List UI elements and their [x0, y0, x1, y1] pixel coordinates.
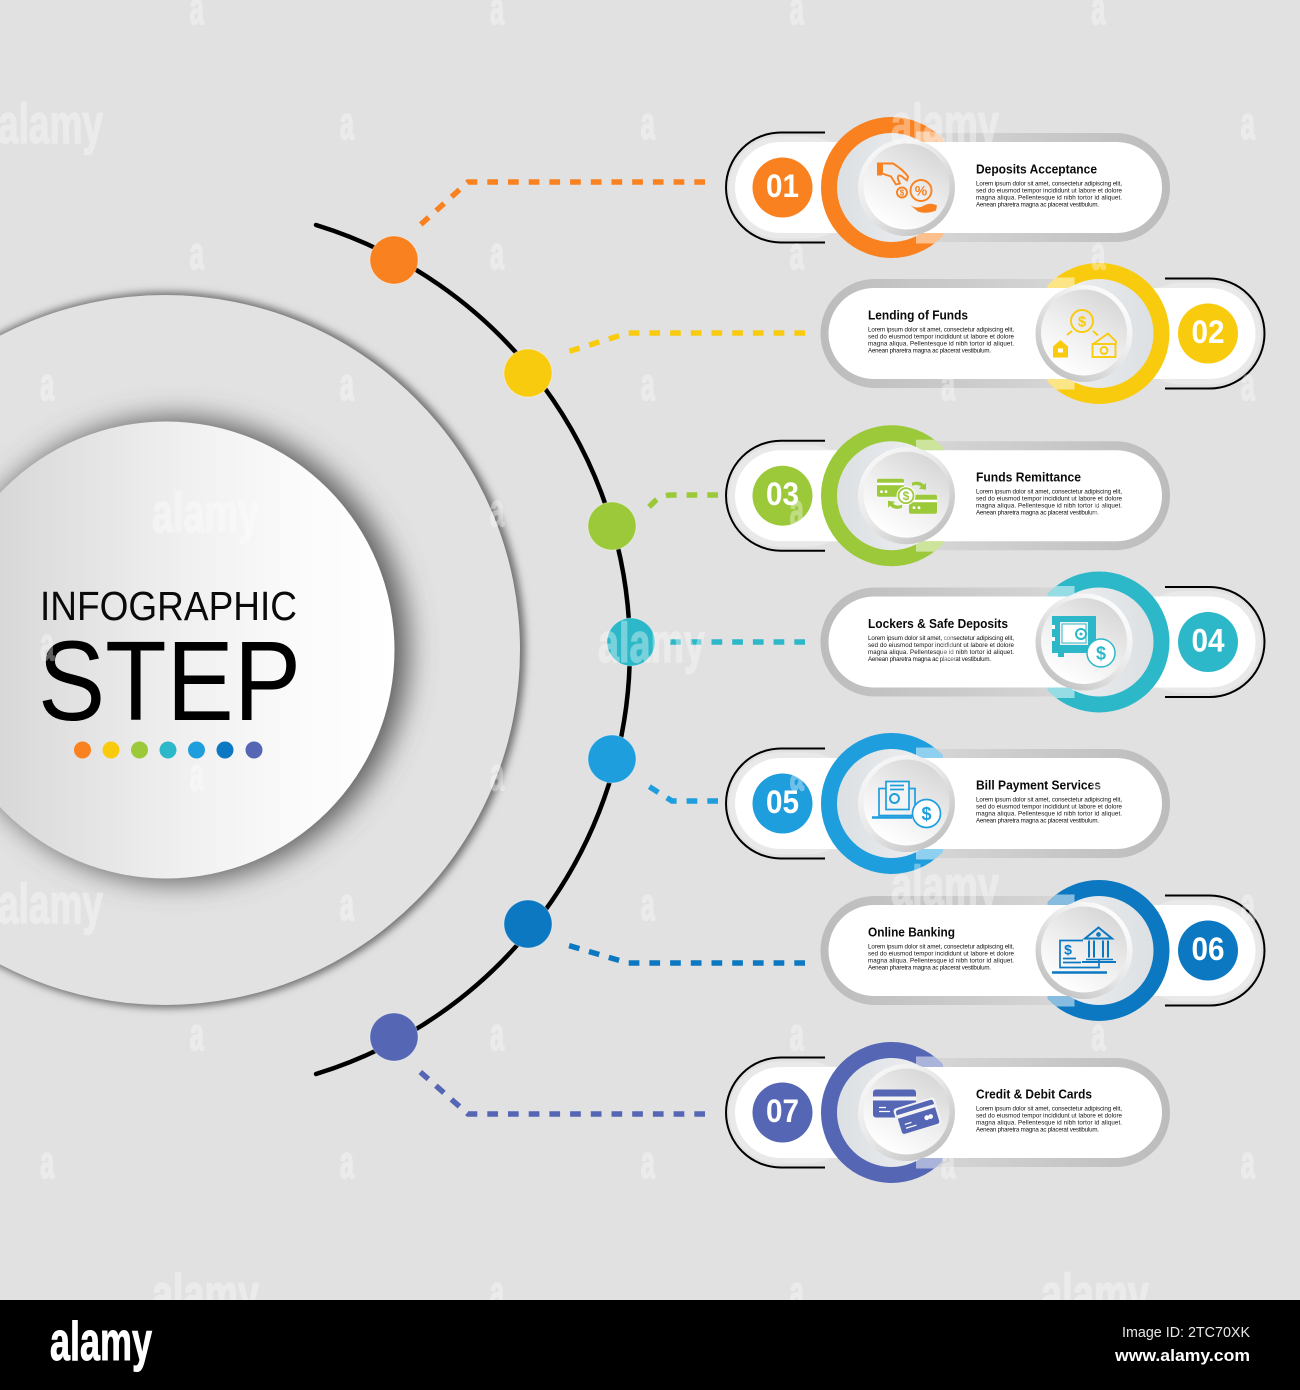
- badge 03: [752, 466, 812, 526]
- text: Lockers and Safe Deposits: Lorem ipsum dolor sit amet, consectetur adipiscing elit,: [868, 635, 1014, 642]
- text: Lockers and Safe Deposits: magna aliqua. Pellentesque id nibh tortor id aliquet.: [868, 649, 1014, 656]
- text: Bill Payment Services: Aenean pharetra magna ac placerat vestibulum.: [976, 818, 1099, 824]
- text: Online Banking: Aenean pharetra magna ac placerat vestibulum.: [868, 964, 991, 972]
- icon: hand and coins: [877, 162, 937, 213]
- panel: step 05 Bill Payment Services: [726, 741, 1170, 866]
- text: Deposits Acceptance: magna aliqua. Pellentesque id nibh tortor id aliquet.: [976, 194, 1122, 202]
- text: Online Banking: Lorem ipsum dolor sit amet, consectetur adipiscing elit,: [868, 944, 1014, 950]
- footer bar: [0, 1300, 1300, 1390]
- timeline nodes: [370, 236, 655, 1061]
- watermark: alamy wordmarks: alamy: [598, 611, 705, 674]
- node 07: [370, 1013, 418, 1061]
- watermark: small a marks: aaaa: [40, 618, 1255, 670]
- footer logo: alamy: [50, 1310, 152, 1372]
- text: Deposits Acceptance: sed do eiusmod tempor incididunt ut labore et dolore: [976, 188, 1123, 194]
- badge 06: [1178, 920, 1238, 980]
- node 05: [588, 735, 636, 783]
- panel: step 03 Funds Remittance: [726, 433, 1170, 558]
- text: Lending of Funds: magna aliqua. Pellentesque id nibh tortor id aliquet.: [868, 340, 1014, 348]
- text: Deposits Acceptance: Deposits Acceptance: [976, 162, 1097, 176]
- footer image id: Image ID: 2TC70XK: [1122, 1324, 1250, 1341]
- watermark: alamy wordmarks: alamy: [0, 92, 103, 155]
- text: Credit and Debit Cards: [976, 1086, 1123, 1134]
- badge 06: 06: [1192, 931, 1224, 967]
- icon: bill documents with coin: $: [921, 804, 932, 824]
- heading line 1: INFOGRAPHIC: [40, 583, 297, 629]
- icon: safe with coin: [1052, 616, 1115, 667]
- watermark: alamy wordmarks: alamy: [152, 481, 259, 544]
- text: Credit and Debit Cards: magna aliqua. Pellentesque id nibh tortor id aliquet.: [976, 1120, 1122, 1126]
- badge 01: 01: [766, 168, 799, 204]
- panel: step 06 Online Banking: [820, 888, 1264, 1013]
- text: Online Banking: sed do eiusmod tempor incididunt ut labore et dolore: [868, 950, 1015, 958]
- badge 04: 04: [1192, 622, 1225, 658]
- icon: laptop and bank: [1052, 928, 1116, 972]
- text: Lending of Funds: Lorem ipsum dolor sit amet, consectetur adipiscing elit,: [868, 326, 1014, 334]
- badge 01: [752, 158, 812, 218]
- watermark: alamy wordmarks: alamy: [1041, 1262, 1149, 1325]
- panel: step 04 Lockers and Safe Deposits: [820, 580, 1264, 704]
- text: Lockers and Safe Deposits: Aenean pharetra magna ac placerat vestibulum.: [868, 656, 991, 663]
- text: Online Banking: magna aliqua. Pellentesque id nibh tortor id aliquet.: [868, 958, 1014, 964]
- heading line 2: STEP: [38, 618, 301, 744]
- text: Lending of Funds: [868, 308, 1015, 354]
- text: Lockers and Safe Deposits: sed do eiusmod tempor incididunt ut labore et dolore: [868, 642, 1015, 649]
- text: Lending of Funds: sed do eiusmod tempor incididunt ut labore et dolore: [868, 334, 1015, 340]
- connector 01: [418, 182, 705, 227]
- watermark: small a marks: aaaaa: [40, 1136, 1255, 1188]
- text: Deposits Acceptance: Aenean pharetra magna ac placerat vestibulum.: [976, 202, 1099, 208]
- text: Bill Payment Services: Bill Payment Services: [976, 778, 1101, 792]
- watermark: small a marks: aaa: [490, 484, 1106, 536]
- watermark: small a marks: aaaa: [190, 227, 1106, 279]
- connector 07: [418, 1070, 705, 1114]
- icon: bill documents with coin: [872, 782, 940, 828]
- connector 05: [645, 784, 718, 801]
- node 04: [607, 618, 655, 666]
- text: Funds Remittance: Aenean pharetra magna ac placerat vestibulum.: [976, 510, 1099, 517]
- black arc timeline: [316, 225, 630, 1074]
- badge 07: [752, 1082, 812, 1142]
- text: Lockers and Safe Deposits: Lockers & Safe Deposits: [868, 616, 1008, 631]
- badge 04: [1178, 612, 1238, 672]
- text: Bill Payment Services: Lorem ipsum dolor sit amet, consectetur adipiscing elit,: [976, 796, 1122, 804]
- text: Credit and Debit Cards: Aenean pharetra magna ac placerat vestibulum.: [976, 1126, 1099, 1134]
- watermark: small a marks: aaa: [340, 97, 1255, 149]
- node 03: [588, 502, 636, 550]
- text: Credit and Debit Cards: sed do eiusmod tempor incididunt ut labore et dolore: [976, 1112, 1123, 1120]
- central concentric circles: [0, 292, 525, 1008]
- text: Online Banking: Online Banking: [868, 924, 955, 940]
- icon: loan house and money: [1053, 310, 1116, 358]
- watermark: small a marks: aaa: [340, 878, 1255, 930]
- watermark: small a marks: aaaa: [190, 1008, 1106, 1060]
- colour dots row: [74, 742, 262, 758]
- watermark: small a marks: aaaaa: [40, 358, 1255, 410]
- watermark: alamy wordmarks: alamy: [0, 872, 103, 935]
- badge 05: [752, 774, 812, 834]
- text: Funds Remittance: sed do eiusmod tempor incididunt ut labore et dolore: [976, 496, 1123, 503]
- text: Deposits Acceptance: Lorem ipsum dolor sit amet, consectetur adipiscing elit,: [976, 180, 1122, 188]
- icon: credit cards: [873, 1090, 942, 1137]
- connector 03: [642, 495, 718, 514]
- node 02: [504, 349, 552, 397]
- badge 02: 02: [1192, 314, 1224, 350]
- text: Lending of Funds: Lending of Funds: [868, 308, 968, 322]
- connector 02: [567, 333, 805, 352]
- watermark: small a marks: aaaa: [190, 748, 1106, 800]
- title: INFOGRAPHIC STEP: [38, 583, 301, 758]
- text: Funds Remittance: Funds Remittance: [976, 470, 1081, 485]
- icon: cards and transfer coin: $: [903, 489, 910, 503]
- icon: cards and transfer coin: [877, 479, 937, 514]
- text: Bill Payment Services: [976, 778, 1123, 824]
- badge 03: 03: [766, 476, 799, 512]
- panel: step 01 Deposits Acceptance: [726, 125, 1170, 250]
- text: Funds Remittance: Lorem ipsum dolor sit amet, consectetur adipiscing elit,: [976, 489, 1122, 496]
- text: Funds Remittance: magna aliqua. Pellentesque id nibh tortor id aliquet.: [976, 503, 1122, 510]
- icon: safe with coin: $: [1096, 644, 1106, 664]
- panel: step 02 Lending of Funds: [820, 271, 1264, 396]
- text: Credit and Debit Cards: Credit & Debit Cards: [976, 1086, 1092, 1102]
- watermark: alamy wordmarks: alamy: [152, 1262, 259, 1325]
- text: Funds Remittance: [976, 470, 1123, 517]
- watermark: alamy wordmarks: alamy: [891, 92, 999, 155]
- watermark: small a marks: aa: [490, 1266, 804, 1318]
- panel: step 07 Credit and Debit Cards: [726, 1050, 1170, 1175]
- badge 02: [1178, 304, 1238, 364]
- icon: laptop and bank: $: [1064, 942, 1072, 958]
- connector 06: [567, 945, 805, 963]
- connector 04: [668, 639, 805, 645]
- icon: hand and coins: %: [915, 182, 928, 198]
- footer url: www.alamy.com: [1114, 1346, 1250, 1365]
- text: Deposits Acceptance: [976, 162, 1123, 208]
- text: Credit and Debit Cards: Lorem ipsum dolor sit amet, consectetur adipiscing elit,: [976, 1106, 1122, 1112]
- icon: loan house and money: $: [1078, 314, 1087, 330]
- badge 07: 07: [766, 1093, 799, 1129]
- text: Bill Payment Services: sed do eiusmod tempor incididunt ut labore et dolore: [976, 804, 1123, 810]
- node 01: [370, 236, 418, 284]
- badge 05: 05: [766, 784, 799, 820]
- text: Online Banking: [868, 924, 1015, 972]
- text: Lockers and Safe Deposits: [868, 616, 1015, 663]
- watermark: alamy wordmarks: alamy: [891, 854, 999, 917]
- icon: hand and coins: $: [900, 188, 905, 198]
- dashed connectors: [418, 182, 805, 1114]
- watermark: alamy wordmarks: [0, 92, 1149, 1325]
- node 06: [504, 900, 552, 948]
- text: Bill Payment Services: magna aliqua. Pellentesque id nibh tortor id aliquet.: [976, 810, 1122, 818]
- text: Lending of Funds: Aenean pharetra magna ac placerat vestibulum.: [868, 348, 991, 354]
